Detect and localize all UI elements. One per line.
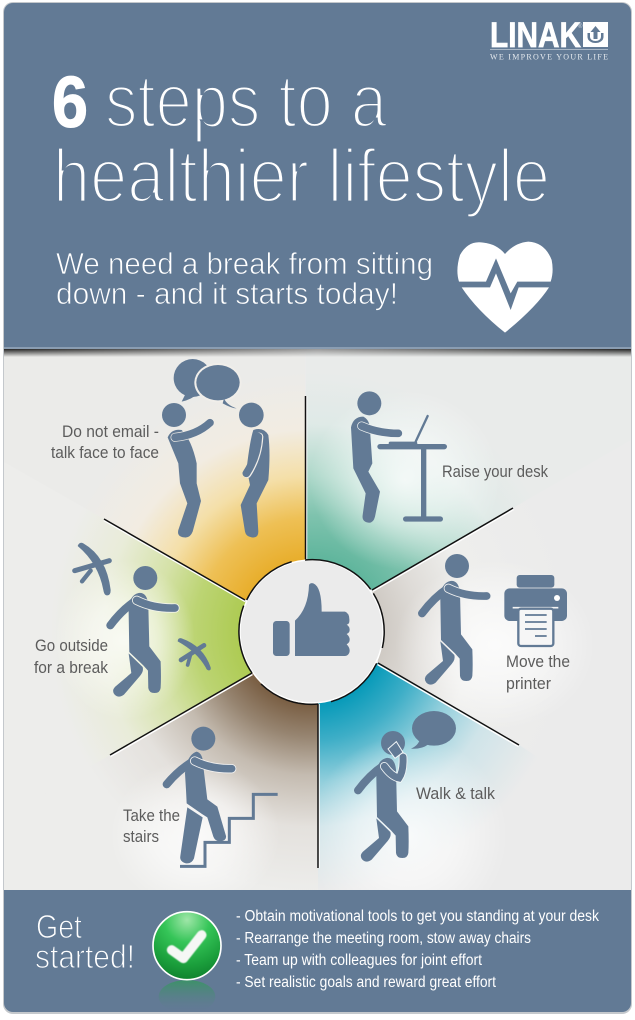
text: tips list: - Set realistic goals and reward great effort	[236, 974, 497, 991]
title: healthier lifestyle	[53, 134, 550, 219]
center circle with thumbs up	[239, 560, 384, 704]
text: Take the stairs	[123, 809, 180, 842]
header shadow	[4, 349, 631, 357]
panel: steps wheel	[4, 349, 631, 935]
step: take the stairs	[123, 727, 278, 866]
text: tips list	[236, 908, 599, 991]
icon: large plane	[75, 543, 111, 595]
step: talk face to face	[51, 359, 269, 537]
step: go outside	[34, 543, 211, 697]
text: tips list: - Team up with colleagues for joint effort	[236, 952, 483, 969]
step: move the printer	[422, 554, 570, 693]
icon: small plane	[178, 638, 211, 670]
icon: walking person	[110, 566, 175, 697]
icon: person on the phone	[358, 731, 409, 862]
icon: green check mark	[153, 912, 221, 1013]
text: tips list: - Rearrange the meeting room, stow away chairs	[236, 930, 531, 947]
title: 6	[52, 63, 88, 143]
text: Go outside for a break: for a break	[34, 658, 108, 677]
icon: printer	[504, 575, 567, 646]
text: Go outside for a break	[34, 639, 108, 673]
heading: Get started	[35, 908, 135, 975]
text: Move the printer: Move the	[506, 652, 570, 671]
title: steps to a	[105, 59, 388, 144]
icon: heart with pulse	[457, 242, 553, 333]
panel: header	[4, 3, 631, 349]
sector: orange	[128, 422, 305, 600]
sector: teal	[306, 404, 504, 590]
text: Move the printer: printer	[506, 674, 551, 693]
text: Take the stairs: stairs	[123, 827, 159, 846]
logo: LINAK: LINAK	[490, 16, 581, 55]
icon: walking person	[422, 554, 487, 685]
text: Raise your desk: Raise your desk	[442, 462, 548, 481]
text: Move the printer	[507, 655, 570, 692]
logo: LINAK: ®	[578, 23, 583, 30]
text: Take the stairs: Take the	[123, 806, 180, 825]
text: Walk & talk: Walk & talk	[416, 784, 495, 803]
text: Do not email	[51, 425, 158, 458]
sector: brown	[123, 673, 318, 883]
subtitle: down - and it starts today!	[56, 276, 398, 311]
subtitle: We need a break from sitting	[56, 246, 433, 281]
icon: two people talking	[162, 359, 269, 537]
sector: grey	[372, 560, 556, 702]
icon: person at standing desk	[351, 391, 444, 523]
step: walk and talk	[358, 711, 495, 862]
text: Do not email: talk face to face	[51, 443, 159, 462]
step: raise your desk	[351, 391, 548, 523]
sector: green	[80, 519, 251, 754]
subtitle	[56, 252, 431, 310]
icon: thumbs up	[273, 583, 350, 656]
text: tips list: - Obtain motivational tools to get you standing at your desk	[236, 908, 599, 925]
heading: Get started: Get	[36, 908, 82, 945]
logo: LINAK	[490, 22, 608, 60]
icon: person climbing stairs	[167, 727, 278, 866]
icon: speech bubble	[411, 711, 456, 749]
dividers	[104, 396, 519, 868]
sector: blue	[318, 663, 522, 890]
panel: get started footer	[4, 890, 631, 1013]
text: Go outside for a break: Go outside	[35, 636, 108, 655]
title	[54, 76, 546, 216]
text: Do not email: Do not email -	[62, 422, 159, 441]
heading: Get started: started!	[35, 938, 135, 975]
logo: LINAK: WE IMPROVE YOUR LIFE	[490, 52, 608, 62]
